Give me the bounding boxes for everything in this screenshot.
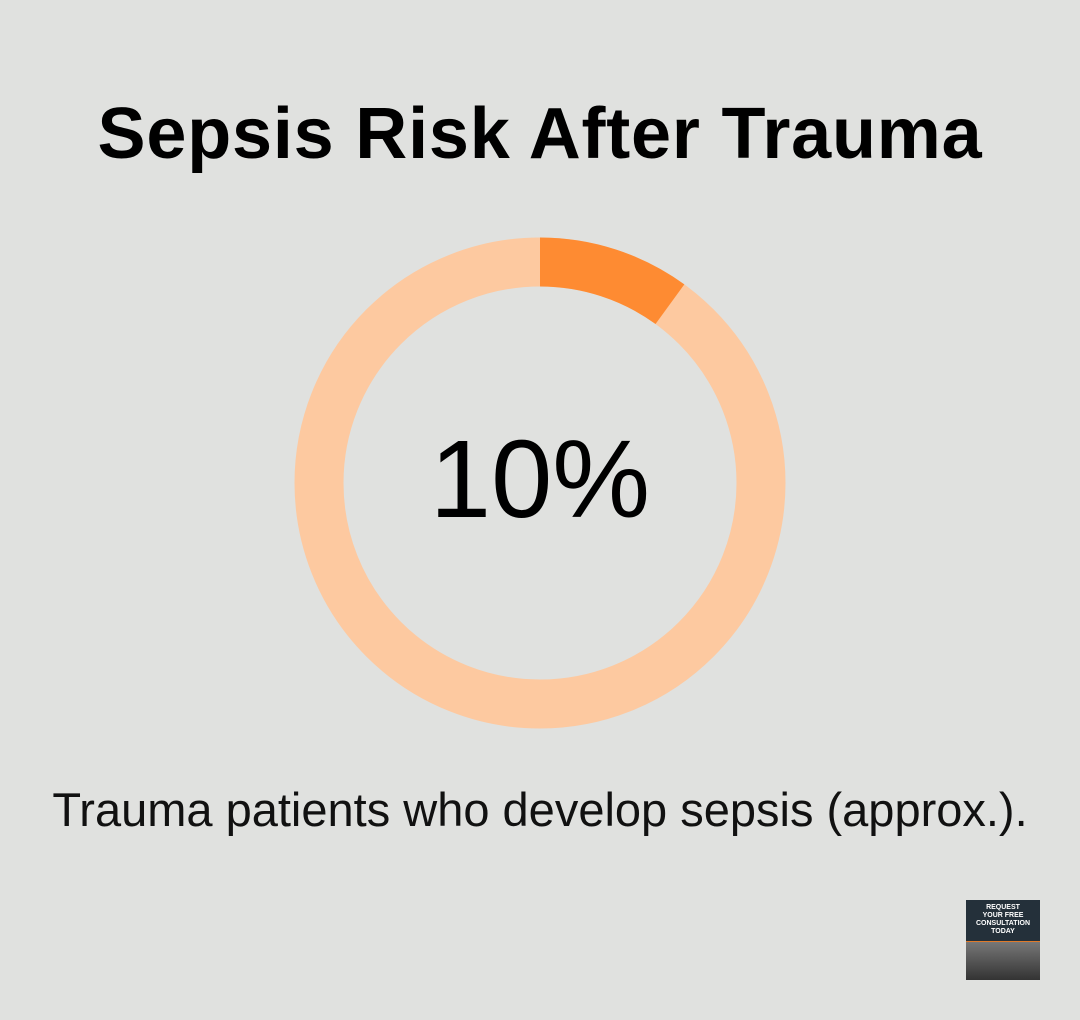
title: Sepsis Risk After Trauma — [98, 94, 982, 174]
badge: consultation: REQUEST — [986, 904, 1020, 911]
caption: Trauma patients who develop sepsis (approx.). — [52, 783, 1028, 836]
badge: consultation: TODAY — [991, 928, 1015, 935]
badge: consultation: CONSULTATION — [976, 920, 1030, 927]
donut chart: 10% — [430, 418, 650, 541]
badge: consultation: YOUR FREE — [983, 912, 1023, 919]
badge: consultation — [966, 900, 1040, 980]
